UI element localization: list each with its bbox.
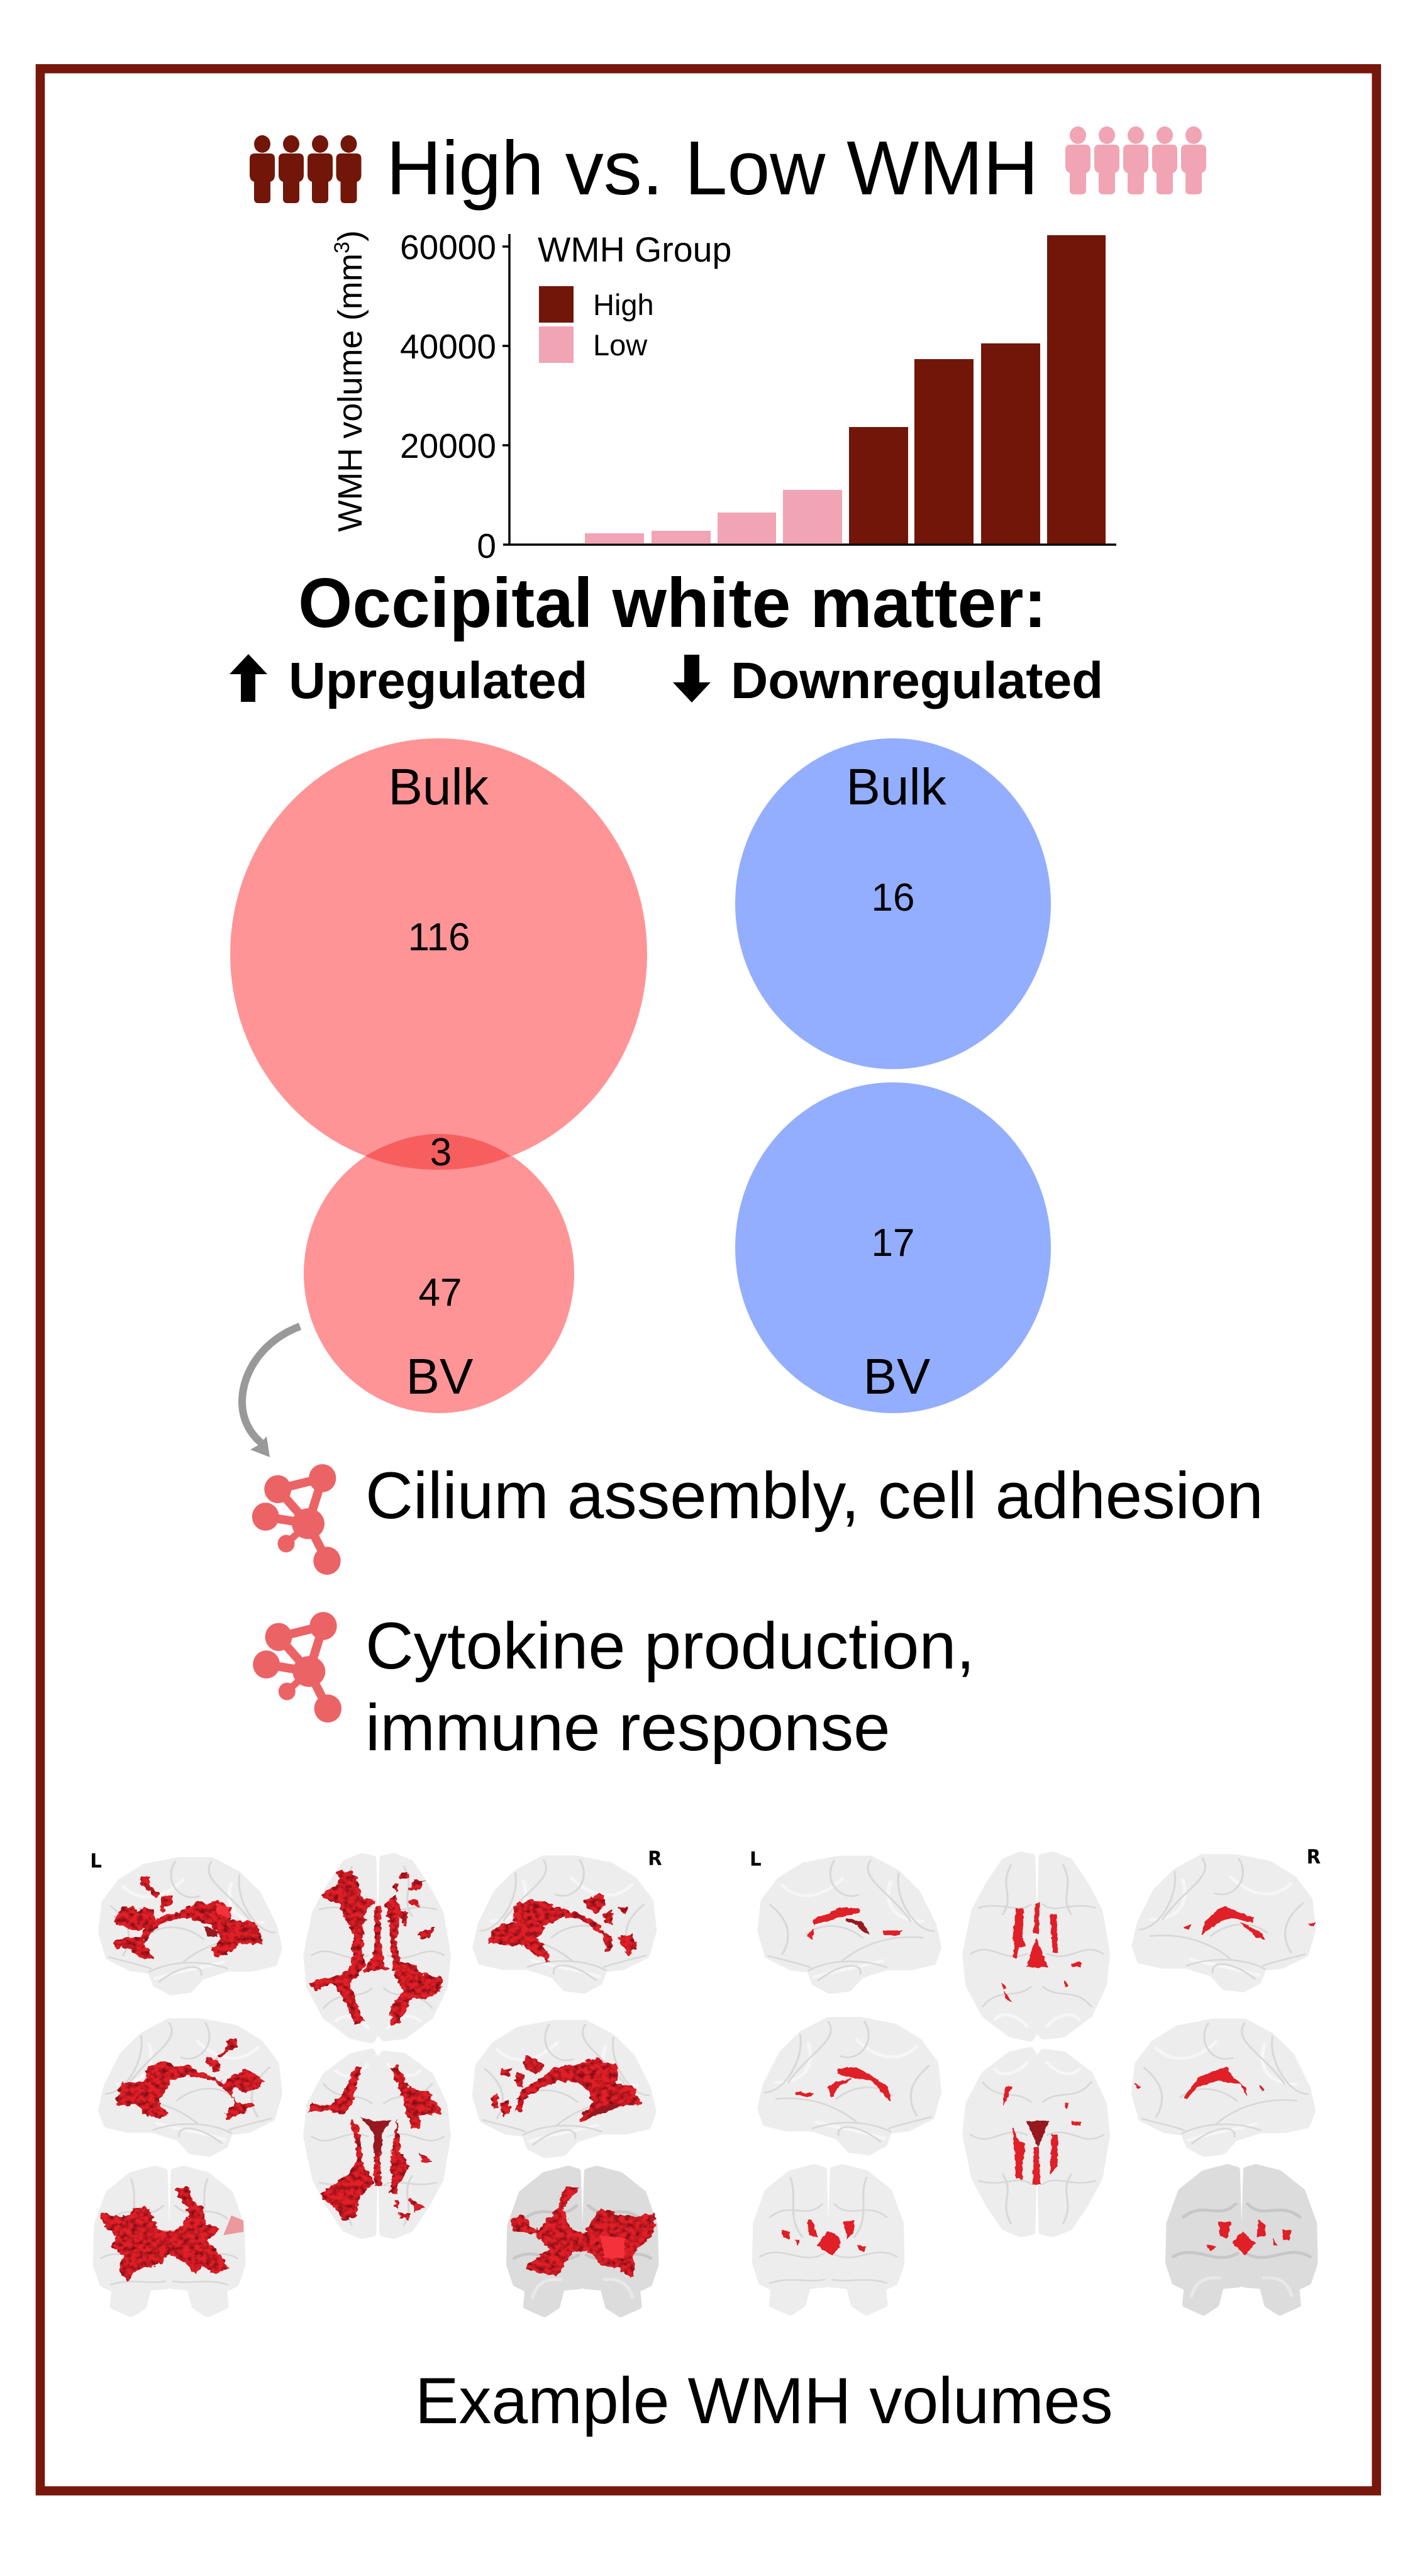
title: High vs. Low WMH <box>386 125 1038 211</box>
y axis tick labels <box>400 228 496 565</box>
label: R: R <box>648 1848 662 1870</box>
y axis tick labels: 0 <box>477 526 496 565</box>
brain panel: high WMH example <box>90 1848 662 2314</box>
venn: upregulated: 3 <box>430 1131 452 1174</box>
y axis title: ) <box>332 230 369 242</box>
icon: high WMH people <box>250 135 361 203</box>
legend: High <box>593 288 654 321</box>
brain: back view <box>1169 2167 1314 2312</box>
y axis tick labels: 60000 <box>400 228 496 267</box>
brain: top view <box>966 1855 1106 2039</box>
icon: low WMH people <box>1065 126 1206 194</box>
label: R: R <box>1307 1846 1321 1868</box>
arrow: down <box>673 655 711 702</box>
brain: right medial upper <box>1135 1857 1315 1989</box>
venn: downregulated: 16 <box>872 876 914 919</box>
text: cytokine production: Cytokine production, <box>365 1609 975 1683</box>
venn: downregulated: 17 <box>872 1221 914 1265</box>
heading: occipital white matter: Occipital white matter: <box>298 564 1046 642</box>
venn: downregulated <box>735 738 1051 1413</box>
text: cytokine production: immune response <box>365 1691 891 1765</box>
legend <box>538 230 731 363</box>
brain: bottom view <box>307 2051 447 2236</box>
venn: upregulated: Bulk <box>388 758 489 816</box>
brain: front view <box>97 2168 243 2314</box>
y axis tick labels: 20000 <box>400 426 496 465</box>
label: downregulated: Downregulated <box>731 652 1103 709</box>
venn: upregulated <box>230 738 647 1413</box>
y axis title: WMH volume (mm <box>332 253 369 532</box>
brain: left lateral upper <box>102 1860 279 1992</box>
brain panel: low WMH example <box>750 1846 1321 2312</box>
brain: back view <box>510 2168 655 2314</box>
venn: upregulated: 47 <box>419 1271 462 1314</box>
text: cytokine production <box>365 1609 975 1765</box>
label: L: L <box>90 1850 102 1873</box>
label: upregulated: Upregulated <box>289 652 587 709</box>
axes <box>502 234 1116 545</box>
high group bars <box>849 235 1106 543</box>
y axis tick labels: 40000 <box>400 327 496 366</box>
icon: network cytokine <box>253 1612 341 1723</box>
icon: network cilium <box>252 1464 341 1575</box>
caption: example WMH volumes: Example WMH volumes <box>415 2365 1113 2438</box>
brain: bottom view <box>966 2050 1106 2235</box>
brain: left lateral upper <box>761 1858 938 1991</box>
arrow: curved gray <box>242 1326 300 1457</box>
low group bars <box>585 490 842 543</box>
venn: downregulated: Bulk <box>846 758 947 816</box>
venn: upregulated: BV <box>406 1348 474 1404</box>
y axis title: 3 <box>330 242 354 253</box>
brain: front view <box>756 2167 901 2312</box>
venn: downregulated: BV <box>863 1348 931 1404</box>
brain: right lateral lower <box>1135 2022 1312 2154</box>
legend: WMH Group <box>538 230 731 269</box>
brain: top view <box>307 1856 447 2040</box>
brain: right lateral lower <box>476 2023 653 2155</box>
venn: upregulated: 116 <box>408 916 470 959</box>
legend: Low <box>593 328 648 362</box>
label: L: L <box>750 1848 762 1871</box>
brain: left medial lower <box>102 2021 279 2153</box>
arrow: up <box>230 654 267 702</box>
brain: left medial lower <box>761 2020 938 2152</box>
text: cilium assembly: Cilium assembly, cell adhesion <box>365 1459 1263 1533</box>
bar chart: WMH volume <box>330 228 1116 565</box>
brain: right medial upper <box>476 1858 653 1990</box>
